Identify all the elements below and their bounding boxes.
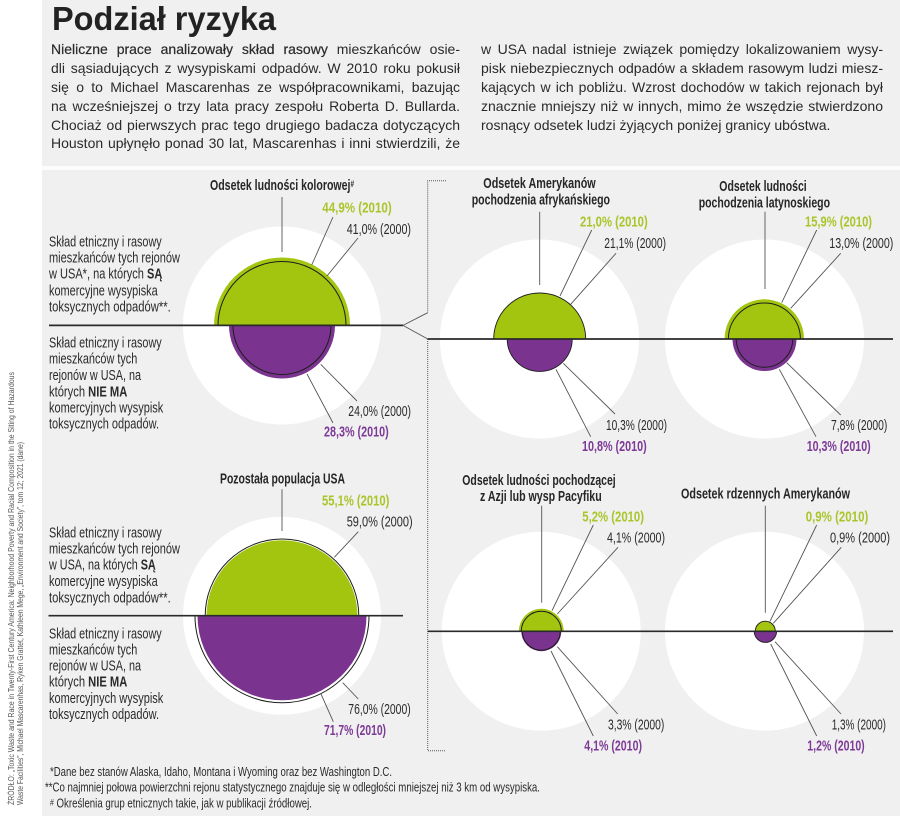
- purple half 2010: [198, 616, 366, 700]
- source note (rotated): Waste Facilities”, Michael Mascarenhas, Ryken Grattet, Kathleen Mege, „Environment and Society”, tom 12; 2021 (dane): [15, 442, 25, 805]
- source note (rotated): [6, 372, 25, 805]
- value labels: 15,9% (2010): [805, 215, 872, 231]
- side text: are landfills: Skład etniczny i rasowy: [49, 234, 162, 251]
- text block: intro left column: na wcześniejszej o trzy lata pracy zespołu Roberta D. Bullarda.: [51, 98, 460, 114]
- side text: are landfills: [48, 234, 180, 315]
- text block: intro right column: pisk niebezpiecznych odpadów a składem rasowym ludzi miesz-: [481, 60, 883, 76]
- white separator band: [42, 166, 900, 170]
- value labels: 1,2% (2010): [807, 739, 865, 755]
- value labels: 10,8% (2010): [582, 439, 647, 455]
- panel: ludność kolorowa: [48, 177, 411, 441]
- background circle: [183, 226, 381, 424]
- side text: no landfills: rejonów w USA, na: [49, 367, 141, 384]
- value labels: [582, 509, 665, 755]
- heading: z Azji lub wysp Pacyfiku: [480, 488, 602, 505]
- side text: no landfills: komercyjnych wysypisk: [49, 399, 164, 416]
- side text: no landfills: rejonów w USA, na: [49, 658, 141, 675]
- outline lower half 2000: [522, 631, 560, 650]
- side text: no landfills: [49, 335, 164, 433]
- leader lines: [540, 212, 616, 437]
- side text: are landfills: [48, 524, 180, 606]
- title: Podział ryzyka: [52, 0, 277, 37]
- value labels: 24,0% (2000): [348, 404, 411, 420]
- panel: ludność z Azji lub wysp Pacyfiku: [462, 472, 665, 755]
- purple half: [507, 339, 572, 371]
- heading: Odsetek ludności: [719, 178, 807, 195]
- text block: intro left column: Chociaż od pierwszych prac tego drugiego badacza dotyczących: [51, 117, 460, 133]
- purple half 2010: [732, 339, 796, 371]
- value labels: 10,3% (2010): [807, 439, 871, 455]
- text block: intro left column: Houston upłynęło ponad 30 lat, Mascarenhas i inni stwierdzili, że: [51, 135, 460, 151]
- purple half 2010: [229, 326, 335, 378]
- value labels: 21,1% (2000): [604, 236, 666, 252]
- purple half: [754, 631, 777, 642]
- green half: [755, 621, 775, 631]
- side text: no landfills: toksycznych odpadów.: [49, 706, 159, 723]
- side text: no landfills: Skład etniczny i rasowy: [49, 335, 162, 352]
- value labels: 4,1% (2010): [584, 739, 642, 755]
- leader lines: [282, 489, 358, 722]
- value labels: [322, 494, 413, 739]
- value labels: 59,0% (2000): [347, 515, 413, 531]
- heading: pochodzenia latynoskiego: [699, 195, 830, 212]
- value labels: 76,0% (2000): [348, 702, 411, 718]
- side text: are landfills: w USA*, na których SĄ: [48, 266, 162, 283]
- green half 2010: [206, 540, 358, 616]
- heading: Pozostała populacja USA: [220, 470, 345, 487]
- outline half 2000: [521, 611, 561, 631]
- heading: [472, 175, 610, 209]
- green half: [494, 293, 586, 339]
- footnotes: [45, 765, 540, 811]
- side text: no landfills: mieszkańców tych: [49, 351, 137, 368]
- side text: no landfills: komercyjnych wysypisk: [49, 690, 164, 707]
- text block: intro right column: [481, 41, 883, 133]
- side text: are landfills: mieszkańców tych rejonów: [49, 540, 180, 557]
- text block: intro left column: dli sąsiadujących z wysypiskami odpadów. W 2010 roku pokusił: [51, 60, 460, 76]
- value labels: 3,3% (2000): [608, 717, 664, 733]
- value labels: 5,2% (2010): [582, 509, 644, 525]
- text block: intro right column: kających w ich pobliżu. Wzrost dochodów w takich rejonach był: [481, 79, 883, 95]
- outline half 2000: [218, 262, 346, 326]
- side text: are landfills: komercyjne wysypiska: [49, 282, 158, 299]
- outline lower half 2000: [736, 339, 793, 367]
- footnotes: Określenia grup etnicznych takie, jak w publikacji źródłowej.: [54, 797, 312, 811]
- side text: no landfills: toksycznych odpadów.: [49, 416, 159, 433]
- side text: are landfills: w USA, na których SĄ: [48, 556, 156, 573]
- leader lines: [765, 506, 841, 736]
- leader lines: [282, 197, 358, 423]
- panel: Amerykanie pochodzenia afrykańskiego: [472, 175, 667, 455]
- value labels: 41,0% (2000): [347, 222, 411, 238]
- text block: intro left column: się o to Michael Mascarenhas ze współpracownikami, bazując: [51, 79, 460, 95]
- side text: are landfills: komercyjne wysypiska: [49, 573, 158, 590]
- value labels: [805, 215, 893, 455]
- text block: intro right column: rosnący odsetek ludzi żyjących poniżej granicy ubóstwa.: [481, 117, 830, 133]
- background circle: [183, 517, 381, 715]
- white circles of the right panels: [440, 240, 864, 731]
- purple half 2010: [521, 631, 561, 651]
- heading: [699, 178, 830, 212]
- value labels: 21,0% (2010): [580, 215, 648, 231]
- value labels: 28,3% (2010): [324, 425, 389, 441]
- axis line: [48, 615, 403, 617]
- side text: no landfills: [49, 625, 164, 723]
- axis line: [49, 324, 403, 326]
- text block: intro right column: znacznie mniejszy niż w innych, mimo że wszędzie stwierdzono: [481, 98, 883, 114]
- value labels: 55,1% (2010): [322, 494, 389, 510]
- heading: #: [350, 179, 354, 189]
- green half 2010: [725, 299, 804, 339]
- footnotes: **Co najmniej połowa powierzchni rejonu statystycznego znajduje się w odległości mniejszej niż 3 km od wysypiska.: [45, 781, 540, 795]
- side text: are landfills: mieszkańców tych rejonów: [49, 250, 180, 267]
- outline lower half 2000: [233, 326, 331, 374]
- footnotes: *Dane bez stanów Alaska, Idaho, Montana i Wyoming oraz bez Washington D.C.: [50, 765, 392, 779]
- panel: ludność pochodzenia latynoskiego: [699, 178, 893, 455]
- value labels: 10,3% (2000): [606, 418, 667, 434]
- outline half 2000: [205, 539, 359, 616]
- side text: are landfills: toksycznych odpadów**.: [49, 298, 171, 315]
- panel: pozostała populacja: [48, 470, 413, 739]
- panel: rdzenni Amerykanie: [681, 486, 890, 755]
- heading: Odsetek Amerykanów: [483, 175, 596, 192]
- value labels: [806, 509, 890, 755]
- green half 2010: [214, 258, 350, 326]
- green half 2010: [519, 609, 564, 631]
- text block: intro left column: [51, 41, 460, 151]
- value labels: [580, 215, 667, 455]
- text block: intro right column: w USA nadal istnieje związek pomiędzy lokalizowaniem wysy-: [481, 41, 883, 57]
- side text: are landfills: toksycznych odpadów**.: [49, 589, 171, 606]
- heading: pochodzenia afrykańskiego: [472, 192, 610, 209]
- side text: no landfills: których NIE MA: [49, 674, 127, 691]
- value labels: [322, 201, 411, 441]
- side text: no landfills: których NIE MA: [49, 383, 127, 400]
- side text: no landfills: Skład etniczny i rasowy: [49, 625, 162, 642]
- side text: no landfills: mieszkańców tych: [49, 641, 137, 658]
- footnotes: #: [50, 798, 54, 808]
- value labels: 0,9% (2010): [806, 509, 868, 525]
- source note (rotated): ŹRÓDŁO: „Toxic Waste and Race in Twenty-First Century America: Neighborhood Poverty and Racial Composition in the Siting of Hazardous: [6, 372, 16, 805]
- value labels: 71,7% (2010): [324, 723, 386, 739]
- axis line: lower right: [428, 630, 893, 632]
- outline lower half 2000: [195, 616, 369, 703]
- text block: intro left column: Nieliczne prace analizowały skład rasowy mieszkańców osie-: [51, 41, 460, 57]
- value labels: 4,1% (2000): [607, 531, 665, 547]
- leader lines: [542, 506, 618, 736]
- bracket connector: [403, 181, 446, 751]
- leader lines: [765, 212, 841, 437]
- side text: are landfills: Skład etniczny i rasowy: [49, 524, 162, 541]
- heading: Odsetek ludności kolorowej: [210, 177, 409, 194]
- heading: [462, 472, 616, 505]
- outline half 2000: [728, 303, 800, 339]
- heading: Odsetek ludności pochodzącej: [462, 472, 616, 489]
- axis line: upper right: [428, 338, 893, 340]
- value labels: 44,9% (2010): [322, 201, 392, 217]
